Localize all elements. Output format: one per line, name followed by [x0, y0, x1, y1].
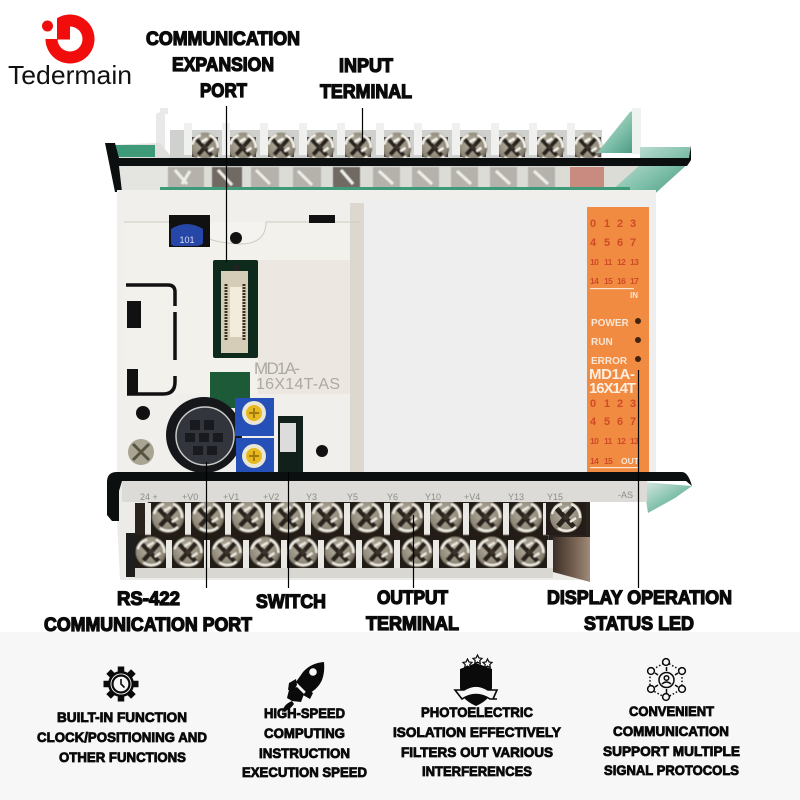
- bottom cover with black bar and teal wedge: Y13: [508, 492, 524, 502]
- orange status LED panel: ERROR: [591, 356, 628, 367]
- orange status LED panel: 6: [617, 416, 623, 428]
- text: ISOLATION EFFECTIVELY: [393, 725, 561, 740]
- feature: high-speed computing: [242, 662, 367, 780]
- bottom cover with black bar and teal wedge: [107, 472, 692, 521]
- side slot: [126, 215, 335, 395]
- orange status LED panel: 5: [604, 416, 610, 428]
- top terminal labels: ~264V: [138, 190, 164, 200]
- orange status LED panel: 0: [590, 218, 596, 230]
- expansion port connector: [213, 260, 258, 358]
- bottom cover with black bar and teal wedge: 24 +: [140, 492, 158, 502]
- label: output terminal: OUTPUT: [377, 588, 448, 609]
- model label: [254, 359, 340, 393]
- capacitor: [169, 215, 210, 247]
- label: output terminal: TERMINAL: [366, 614, 459, 635]
- text: OTHER FUNCTIONS: [59, 750, 186, 765]
- orange status LED panel: 0: [590, 398, 596, 410]
- model label: 16X14T-AS: [256, 376, 340, 393]
- top cover with black bar: X14: [560, 190, 576, 200]
- rotary switches: [235, 398, 274, 474]
- logo: Tedermain: [8, 10, 132, 90]
- device body: [117, 190, 656, 480]
- icon: rocket: [282, 662, 324, 712]
- bottom cover with black bar and teal wedge: +V4: [464, 492, 480, 502]
- top cover with black bar: X12: [519, 190, 535, 200]
- leader line: RS-422: [206, 462, 208, 588]
- top cover with black bar: X0: [314, 190, 325, 200]
- top cover with black bar: [105, 143, 691, 200]
- label: display operation status LED: STATUS LED: [584, 614, 694, 635]
- top cover with black bar: L: [194, 190, 199, 200]
- label: communication expansion port: COMMUNICATION: [146, 29, 300, 50]
- leader line: output terminal: [412, 515, 414, 588]
- orange status LED panel: 16: [617, 276, 626, 286]
- label: RS-422 communication port: COMMUNICATION PORT: [44, 615, 252, 636]
- leader line: input terminal: [362, 108, 364, 142]
- orange status LED panel: 16X14T: [589, 380, 636, 397]
- orange status LED panel: 7: [630, 416, 636, 428]
- RS-422 round connector: [166, 397, 242, 473]
- bottom cover with black bar and teal wedge: +V0: [182, 492, 198, 502]
- bottom cover with black bar and teal wedge: -AS: [618, 490, 633, 500]
- text: INTERFERENCES: [422, 764, 532, 779]
- orange status LED panel: 6: [617, 237, 623, 249]
- orange status LED panel: 11: [604, 257, 613, 267]
- orange status LED panel: 12: [617, 257, 626, 267]
- PCB: [210, 372, 250, 408]
- leader line: switch: [288, 472, 290, 588]
- orange status LED panel: POWER: [591, 318, 630, 329]
- label: switch: SWITCH: [256, 592, 326, 613]
- text: [603, 704, 740, 778]
- bottom cover with black bar and teal wedge: Y3: [306, 492, 317, 502]
- orange status LED panel: 3: [630, 218, 636, 230]
- teal fin top right: [597, 108, 641, 153]
- feature: photoelectric isolation: [393, 655, 561, 779]
- orange status LED panel: 5: [604, 237, 610, 249]
- capacitor: 101: [179, 235, 195, 245]
- icon: gear with clock: [104, 666, 138, 702]
- leader line: communication expansion port: [226, 106, 228, 262]
- text: SIGNAL PROTOCOLS: [604, 763, 739, 778]
- label: output terminal: [366, 588, 459, 635]
- bottom cover with black bar and teal wedge: Y5: [347, 492, 358, 502]
- orange status LED panel: 1: [604, 218, 610, 230]
- label: communication expansion port: [146, 29, 300, 102]
- orange status LED panel: 2: [617, 218, 623, 230]
- orange status LED panel: 10: [590, 257, 599, 267]
- bottom cover with black bar and teal wedge: +V2: [263, 492, 279, 502]
- text: HIGH-SPEED: [264, 706, 345, 721]
- feature: built-in function: [37, 666, 207, 765]
- icon: hexagon network with person: [648, 659, 685, 700]
- orange status LED panel: 1: [604, 398, 610, 410]
- top terminal block: [156, 108, 641, 161]
- text: FILTERS OUT VARIOUS: [401, 745, 553, 760]
- logo: Tedermain: Tedermain: [8, 60, 132, 90]
- orange status LED panel: 14: [590, 276, 599, 286]
- label: input terminal: TERMINAL: [320, 82, 412, 103]
- top cover with black bar: X6: [437, 190, 448, 200]
- orange status LED panel: 2: [617, 398, 623, 410]
- top cover with black bar: X16: [602, 190, 618, 200]
- icon: shield with stars and ribbon: [455, 655, 497, 706]
- orange status LED panel: 7: [630, 237, 636, 249]
- PLC device photo recreation: [105, 108, 692, 582]
- text: PHOTOELECTRIC: [421, 705, 533, 720]
- text: COMMUNICATION: [613, 724, 729, 739]
- orange status LED panel: 11: [604, 436, 613, 446]
- orange status LED panel: 14: [590, 456, 599, 466]
- orange status LED panel: IN: [630, 291, 638, 300]
- label: communication expansion port: EXPANSION: [172, 55, 274, 76]
- orange status LED panel: 12: [617, 436, 626, 446]
- text: [242, 706, 367, 780]
- orange status LED panel: 4: [590, 237, 597, 249]
- text: [37, 710, 207, 765]
- bottom cover with black bar and teal wedge: +V1: [223, 492, 239, 502]
- top cover with black bar: X10: [477, 190, 493, 200]
- top cover with black bar: N: [236, 190, 242, 200]
- top cover with black bar: X4: [397, 190, 408, 200]
- text: BUILT-IN FUNCTION: [57, 710, 187, 725]
- orange status LED panel: 3: [630, 398, 636, 410]
- model label: MD1A-: [254, 359, 300, 378]
- top cover with black bar: COM: [268, 190, 289, 200]
- label: RS-422 communication port: RS-422: [117, 589, 180, 610]
- text: EXECUTION SPEED: [242, 765, 367, 780]
- bottom cover with black bar and teal wedge: Y10: [425, 492, 441, 502]
- orange status LED panel: MD1A-: [589, 366, 635, 383]
- orange status LED panel: 10: [590, 436, 599, 446]
- orange status LED panel: 4: [590, 416, 597, 428]
- holes and screw: [128, 406, 328, 465]
- orange status LED panel: RUN: [591, 337, 613, 348]
- label: RS-422 communication port: [44, 589, 252, 636]
- bottom terminal block: [107, 472, 692, 582]
- orange status LED panel: 15: [604, 276, 613, 286]
- orange status LED panel: [587, 207, 649, 472]
- slide switch: [278, 416, 303, 474]
- text: COMPUTING: [264, 726, 345, 741]
- bottom cover with black bar and teal wedge: Y6: [387, 492, 398, 502]
- orange status LED panel: 17: [630, 276, 639, 286]
- bottom cover with black bar and teal wedge: Y15: [547, 492, 563, 502]
- orange status LED panel: 15: [604, 456, 613, 466]
- leader line: display operation status LED: [638, 370, 640, 588]
- footer panel background: [0, 632, 800, 800]
- label: communication expansion port: PORT: [200, 81, 247, 102]
- text: INSTRUCTION: [259, 746, 350, 761]
- feature: convenient communication: [603, 659, 740, 778]
- label: display operation status LED: [547, 588, 732, 635]
- text: CLOCK/POSITIONING AND: [37, 730, 207, 745]
- text: [393, 705, 561, 779]
- label: input terminal: INPUT: [339, 56, 393, 77]
- text: SUPPORT MULTIPLE: [603, 744, 740, 759]
- top cover with black bar: X2: [355, 190, 366, 200]
- label: display operation status LED: DISPLAY OPERATION: [547, 588, 732, 609]
- orange status LED panel: OUT: [621, 456, 640, 466]
- label: input terminal: [320, 56, 412, 103]
- orange status LED panel: 13: [630, 257, 639, 267]
- text: CONVENIENT: [629, 704, 715, 719]
- orange status LED panel: 13: [630, 436, 639, 446]
